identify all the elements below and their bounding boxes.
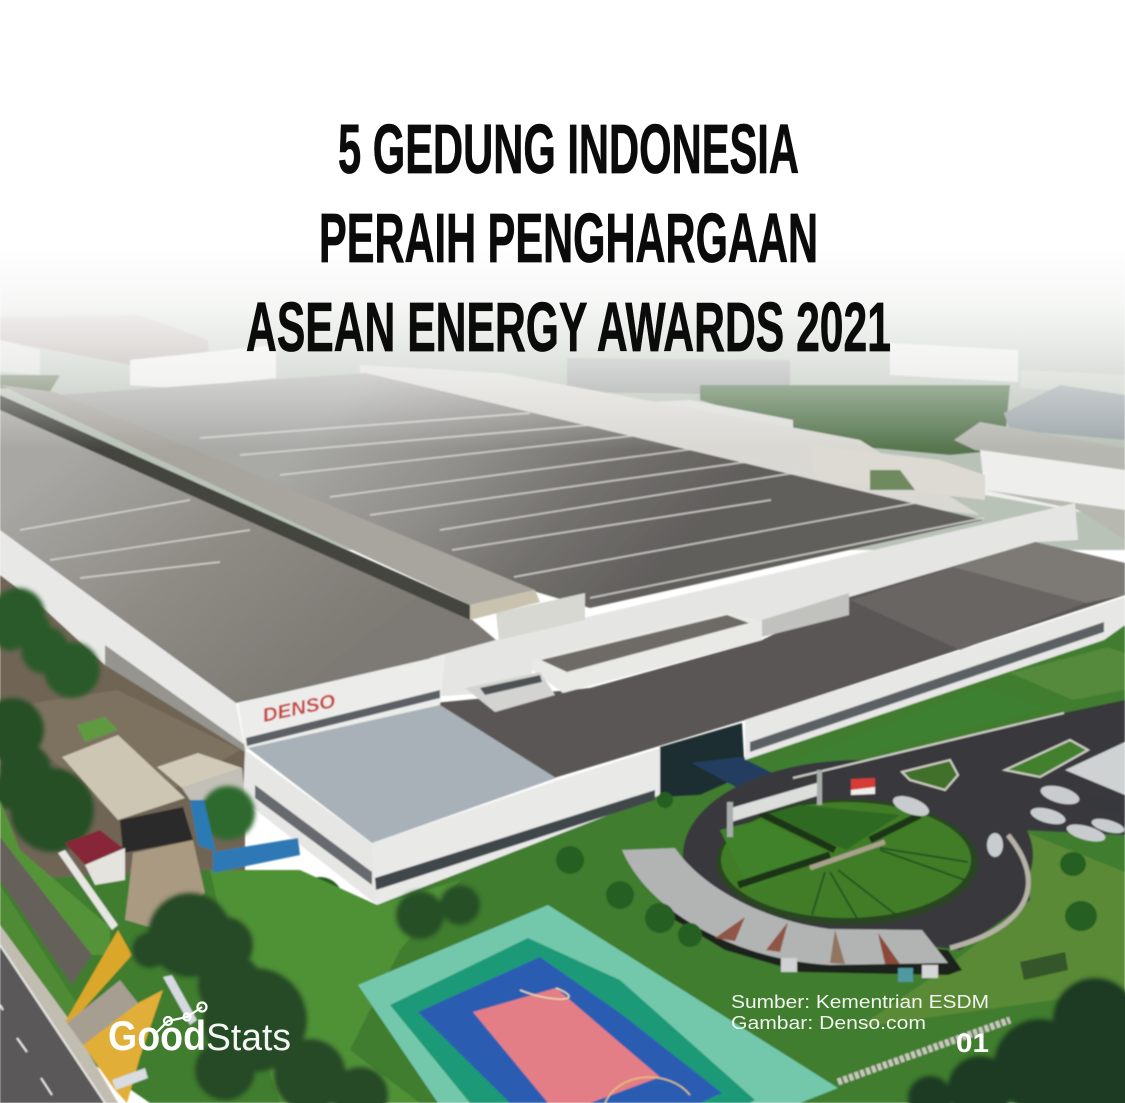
lower building walls <box>243 597 1125 905</box>
source credit <box>731 991 989 1033</box>
roof seams <box>20 413 984 598</box>
DENSO hedge lettering <box>1020 952 1068 980</box>
side planter <box>1005 740 1088 777</box>
yellow ramps <box>65 930 197 1103</box>
lawn strip by the building <box>776 687 1046 773</box>
sports court <box>358 905 838 1103</box>
lower lawn <box>620 990 1125 1103</box>
title <box>246 110 891 366</box>
parking canopy right <box>1065 742 1125 795</box>
rooftop box <box>465 613 762 712</box>
left ground <box>30 690 240 820</box>
source credit: Sumber: Kementrian ESDM <box>731 991 989 1012</box>
circular garden <box>716 799 978 925</box>
logo: GoodStats: Stats <box>206 1017 291 1059</box>
upper-right garden <box>1010 647 1125 700</box>
ground behind left side <box>0 570 245 880</box>
logo: GoodStats <box>108 1002 291 1059</box>
blue hoarding <box>190 800 300 873</box>
glass canopy <box>692 757 793 797</box>
bright lawn near the court <box>210 870 460 1103</box>
main building: upper roof <box>55 373 983 608</box>
lawn base <box>0 625 1125 1103</box>
trees: left cluster upper <box>0 588 100 698</box>
central roof ridge <box>0 385 540 620</box>
trees: left cluster middle <box>0 698 94 852</box>
distant factory complex <box>0 250 1125 550</box>
small lawn patch <box>77 717 118 742</box>
photo: aerial view of the Denso factory <box>0 250 1125 1103</box>
upper white wall <box>430 503 1078 697</box>
page number: 01 <box>956 1028 989 1058</box>
logo network icon <box>157 1002 206 1032</box>
trees: centre-left cluster <box>132 893 388 1103</box>
source credit: Gambar: Denso.com <box>731 1012 926 1033</box>
main building: lower-left roof <box>0 402 496 703</box>
white louvre panel <box>496 593 585 640</box>
light metal roof <box>248 705 556 843</box>
roundabout planter <box>902 760 958 790</box>
white fade over upper photo <box>0 0 1125 450</box>
DENSO wall sign: DENSO <box>261 691 338 727</box>
right lawn <box>840 830 1125 1040</box>
zigzag path <box>838 1020 1010 1082</box>
curved kerb <box>950 835 1028 948</box>
parked cars <box>890 782 1125 857</box>
front wall under DENSO sign <box>238 655 445 750</box>
lower dark roof <box>434 542 1125 778</box>
retaining wall <box>0 837 92 985</box>
verge lawn <box>0 800 110 955</box>
hedge by court <box>396 885 480 939</box>
rooftop fence <box>762 593 849 637</box>
carport building left <box>58 735 245 930</box>
entrance gate sign <box>727 770 822 837</box>
curved carport <box>622 848 962 982</box>
logo: GoodStats: Good <box>108 1012 206 1059</box>
road <box>0 925 118 1103</box>
main building: side wall <box>0 530 245 752</box>
round shrubs <box>297 792 1097 947</box>
tree by the shed <box>201 786 255 840</box>
lower verge grass <box>0 885 78 1018</box>
asphalt driveway <box>683 700 1125 950</box>
flag <box>851 778 875 795</box>
title: 5 GEDUNG INDONESIA <box>338 110 799 188</box>
trees: bottom-right cluster <box>908 978 1125 1103</box>
glass entrance block <box>660 723 745 797</box>
